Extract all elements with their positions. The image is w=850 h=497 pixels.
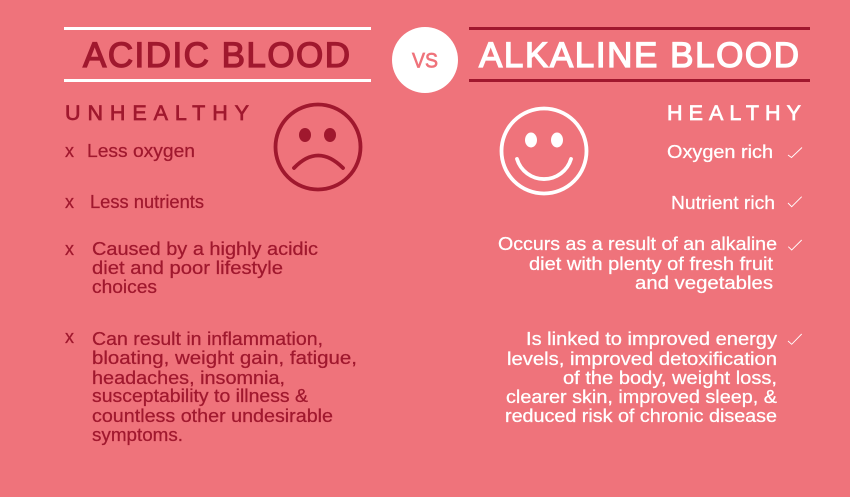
- heading: acidic blood: [64, 27, 371, 82]
- heading: alkaline blood: [469, 27, 810, 82]
- healthy item: alkaline diet: [498, 234, 802, 293]
- unhealthy item: caused by diet: diet and poor lifestyle: [92, 258, 283, 278]
- healthy item: benefits: reduced risk of chronic disease: [505, 406, 777, 426]
- unhealthy item: less nutrients: x: [65, 192, 74, 212]
- vs badge: [392, 27, 458, 93]
- healthy item: alkaline diet: Occurs as a result of an alkaline: [498, 234, 777, 254]
- healthy item: nutrient rich: Nutrient rich: [671, 193, 775, 213]
- healthy item: benefits: clearer skin, improved sleep, &: [506, 387, 777, 407]
- healthy item: alkaline diet: diet with plenty of fresh fruit: [529, 254, 773, 274]
- vs badge: VS: [412, 50, 438, 72]
- unhealthy item: caused by diet: Caused by a highly acidic: [92, 239, 318, 259]
- unhealthy item: less oxygen: x: [65, 141, 74, 161]
- healthy item: benefits: Is linked to improved energy: [526, 329, 777, 349]
- unhealthy item: symptoms: susceptability to illness &: [92, 386, 308, 406]
- healthy item: benefits: levels, improved detoxification: [507, 349, 777, 369]
- unhealthy item: symptoms: countless other undesirable: [92, 406, 333, 426]
- heading: alkaline blood: ALKALINE BLOOD: [479, 36, 799, 75]
- unhealthy item: symptoms: x: [65, 327, 74, 347]
- unhealthy item: caused by diet: x: [65, 239, 74, 259]
- healthy item: oxygen rich: Oxygen rich: [667, 142, 773, 162]
- unhealthy item: less oxygen: Less oxygen: [87, 141, 195, 161]
- unhealthy item: symptoms: headaches, insomnia,: [92, 368, 285, 388]
- icon: sad face: [276, 104, 360, 190]
- unhealthy item: symptoms: [65, 327, 357, 445]
- healthy item: benefits: [505, 329, 802, 426]
- subheading: unhealthy: UNHEALTHY: [65, 101, 249, 125]
- healthy item: alkaline diet: and vegetables: [635, 273, 773, 293]
- unhealthy item: symptoms: symptoms.: [92, 425, 183, 445]
- unhealthy item: caused by diet: [65, 239, 318, 297]
- healthy item: benefits: of the body, weight loss,: [563, 368, 777, 388]
- heading: acidic blood: ACIDIC BLOOD: [83, 36, 350, 75]
- unhealthy item: symptoms: Can result in inflammation,: [92, 329, 323, 349]
- unhealthy item: caused by diet: choices: [92, 277, 157, 297]
- unhealthy item: less nutrients: Less nutrients: [90, 192, 204, 212]
- subheading: healthy: HEALTHY: [667, 101, 801, 125]
- icon: happy face: [502, 108, 586, 194]
- unhealthy item: symptoms: bloating, weight gain, fatigue,: [92, 348, 357, 368]
